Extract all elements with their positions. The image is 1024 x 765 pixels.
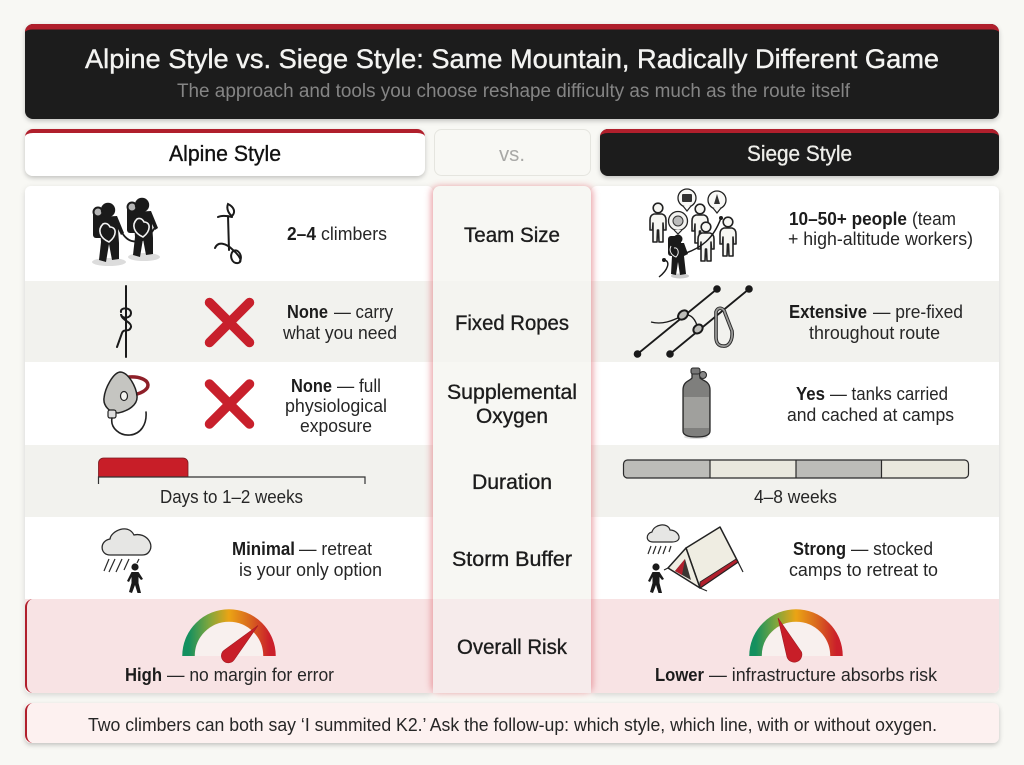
text: Minimal, retreat is your only option [232,539,382,580]
text: Minimal, retreat is your only option: Minimal [232,539,295,559]
text: Strong, stocked camps to retreat to [789,539,938,580]
icon: oxygen mask [104,372,149,435]
chart: Siege duration segmented bar [624,460,968,507]
icon: stocked tent with storm cloud [647,525,743,593]
label: Supplemental Oxygen: Oxygen [476,405,548,428]
text: Strong, stocked camps to retreat to: camps to retreat to [789,560,938,580]
vs. badge: vs. [499,144,525,166]
icon: oxygen tank [683,368,710,439]
text: Extensive, pre-fixed throughout route [789,302,963,343]
text: Yes, tanks carried and cached at camps: Yes [796,384,825,404]
column header: Alpine Style: Alpine Style [169,141,281,166]
label: Duration: Duration [472,471,552,494]
title: Alpine Style vs. Siege Style: Same Mountain, Radically Different Game [85,44,939,74]
column header: Siege Style [600,129,999,176]
text: 10-50+ people: + high-altitude workers) [788,229,973,249]
label: Fixed Ropes: Fixed Ropes [455,312,569,335]
text: Yes, tanks carried and cached at camps [787,384,954,425]
callout: footer takeaway [25,703,999,743]
label: Supplemental Oxygen: Supplemental [447,381,577,404]
panel: Alpine rows [25,186,433,693]
text: 10-50+ people [788,209,973,249]
icon: storm cloud and lone climber [102,529,151,593]
text: None, full physiological exposure [285,376,387,436]
gauge: lower risk: — infrastructure absorbs risk [709,665,938,685]
text: Yes, tanks carried and cached at camps: and cached at camps [787,405,954,425]
label: Supplemental Oxygen [447,381,577,428]
gauge: high risk [125,616,334,685]
vs. badge [434,130,590,176]
subtitle: The approach and tools you choose reshape difficulty as much as the route itself [177,81,851,102]
label: Team Size: Team Size [464,224,560,247]
label: Overall Risk: Overall Risk [457,636,567,659]
callout: footer takeaway: Two climbers can both say ‘I summited K2.’ Ask the follow-up: which style, which line, with or without oxygen. [88,715,937,735]
text: None, full physiological exposure: physiological [285,396,387,416]
gauge: high risk: High [125,665,162,685]
icon: knot on rope [117,286,131,357]
text: None, carry what you need: — carry [334,302,393,322]
icon: fixed ropes and carabiner [634,285,753,358]
icon: red X, oxygen [210,384,250,424]
gauge: lower risk [655,616,938,685]
text: 2-4 climbers [287,224,387,244]
icon: red X, fixed ropes [210,302,250,342]
text: 10-50+ people: (team [912,209,956,229]
chart: Siege duration segmented bar: 4–8 weeks [754,487,837,507]
text: Strong, stocked camps to retreat to: Strong [793,539,846,559]
icon: rope coil [215,204,241,263]
text: Extensive, pre-fixed throughout route: Extensive [789,302,867,322]
gauge: lower risk: Lower [655,665,704,685]
title banner [25,24,999,119]
text: Minimal, retreat is your only option: — retreat [299,539,372,559]
chart: Alpine duration bar [98,458,365,507]
text: None, full physiological exposure: — full [337,376,381,396]
icon: two roped climbers [92,198,160,266]
text: 2-4 climbers: 2–4 [287,224,316,244]
text: None, carry what you need [282,302,397,343]
text: 10-50+ people: 10–50+ people [789,209,907,229]
column header: Siege Style: Siege Style [747,141,852,166]
text: Extensive, pre-fixed throughout route: throughout route [809,323,940,343]
chart: Alpine duration bar: Days to 1–2 weeks [160,487,303,507]
text: None, full physiological exposure: exposure [300,416,372,436]
text: 2-4 climbers: climbers [321,224,387,244]
text: None, full physiological exposure: None [291,376,332,396]
column header: Alpine Style [25,129,425,176]
text: Strong, stocked camps to retreat to: — stocked [851,539,933,559]
gauge: high risk: — no margin for error [167,665,334,685]
center category column [431,186,593,693]
icon: siege team with porters [650,189,736,278]
text: None, carry what you need: None [287,302,328,322]
text: Extensive, pre-fixed throughout route: — pre-fixed [873,302,963,322]
panel: Siege rows [591,186,999,693]
label: Storm Buffer: Storm Buffer [452,548,572,571]
text: Minimal, retreat is your only option: is your only option [239,560,382,580]
text: Yes, tanks carried and cached at camps: — tanks carried [830,384,948,404]
text: None, carry what you need: what you need [282,323,397,343]
